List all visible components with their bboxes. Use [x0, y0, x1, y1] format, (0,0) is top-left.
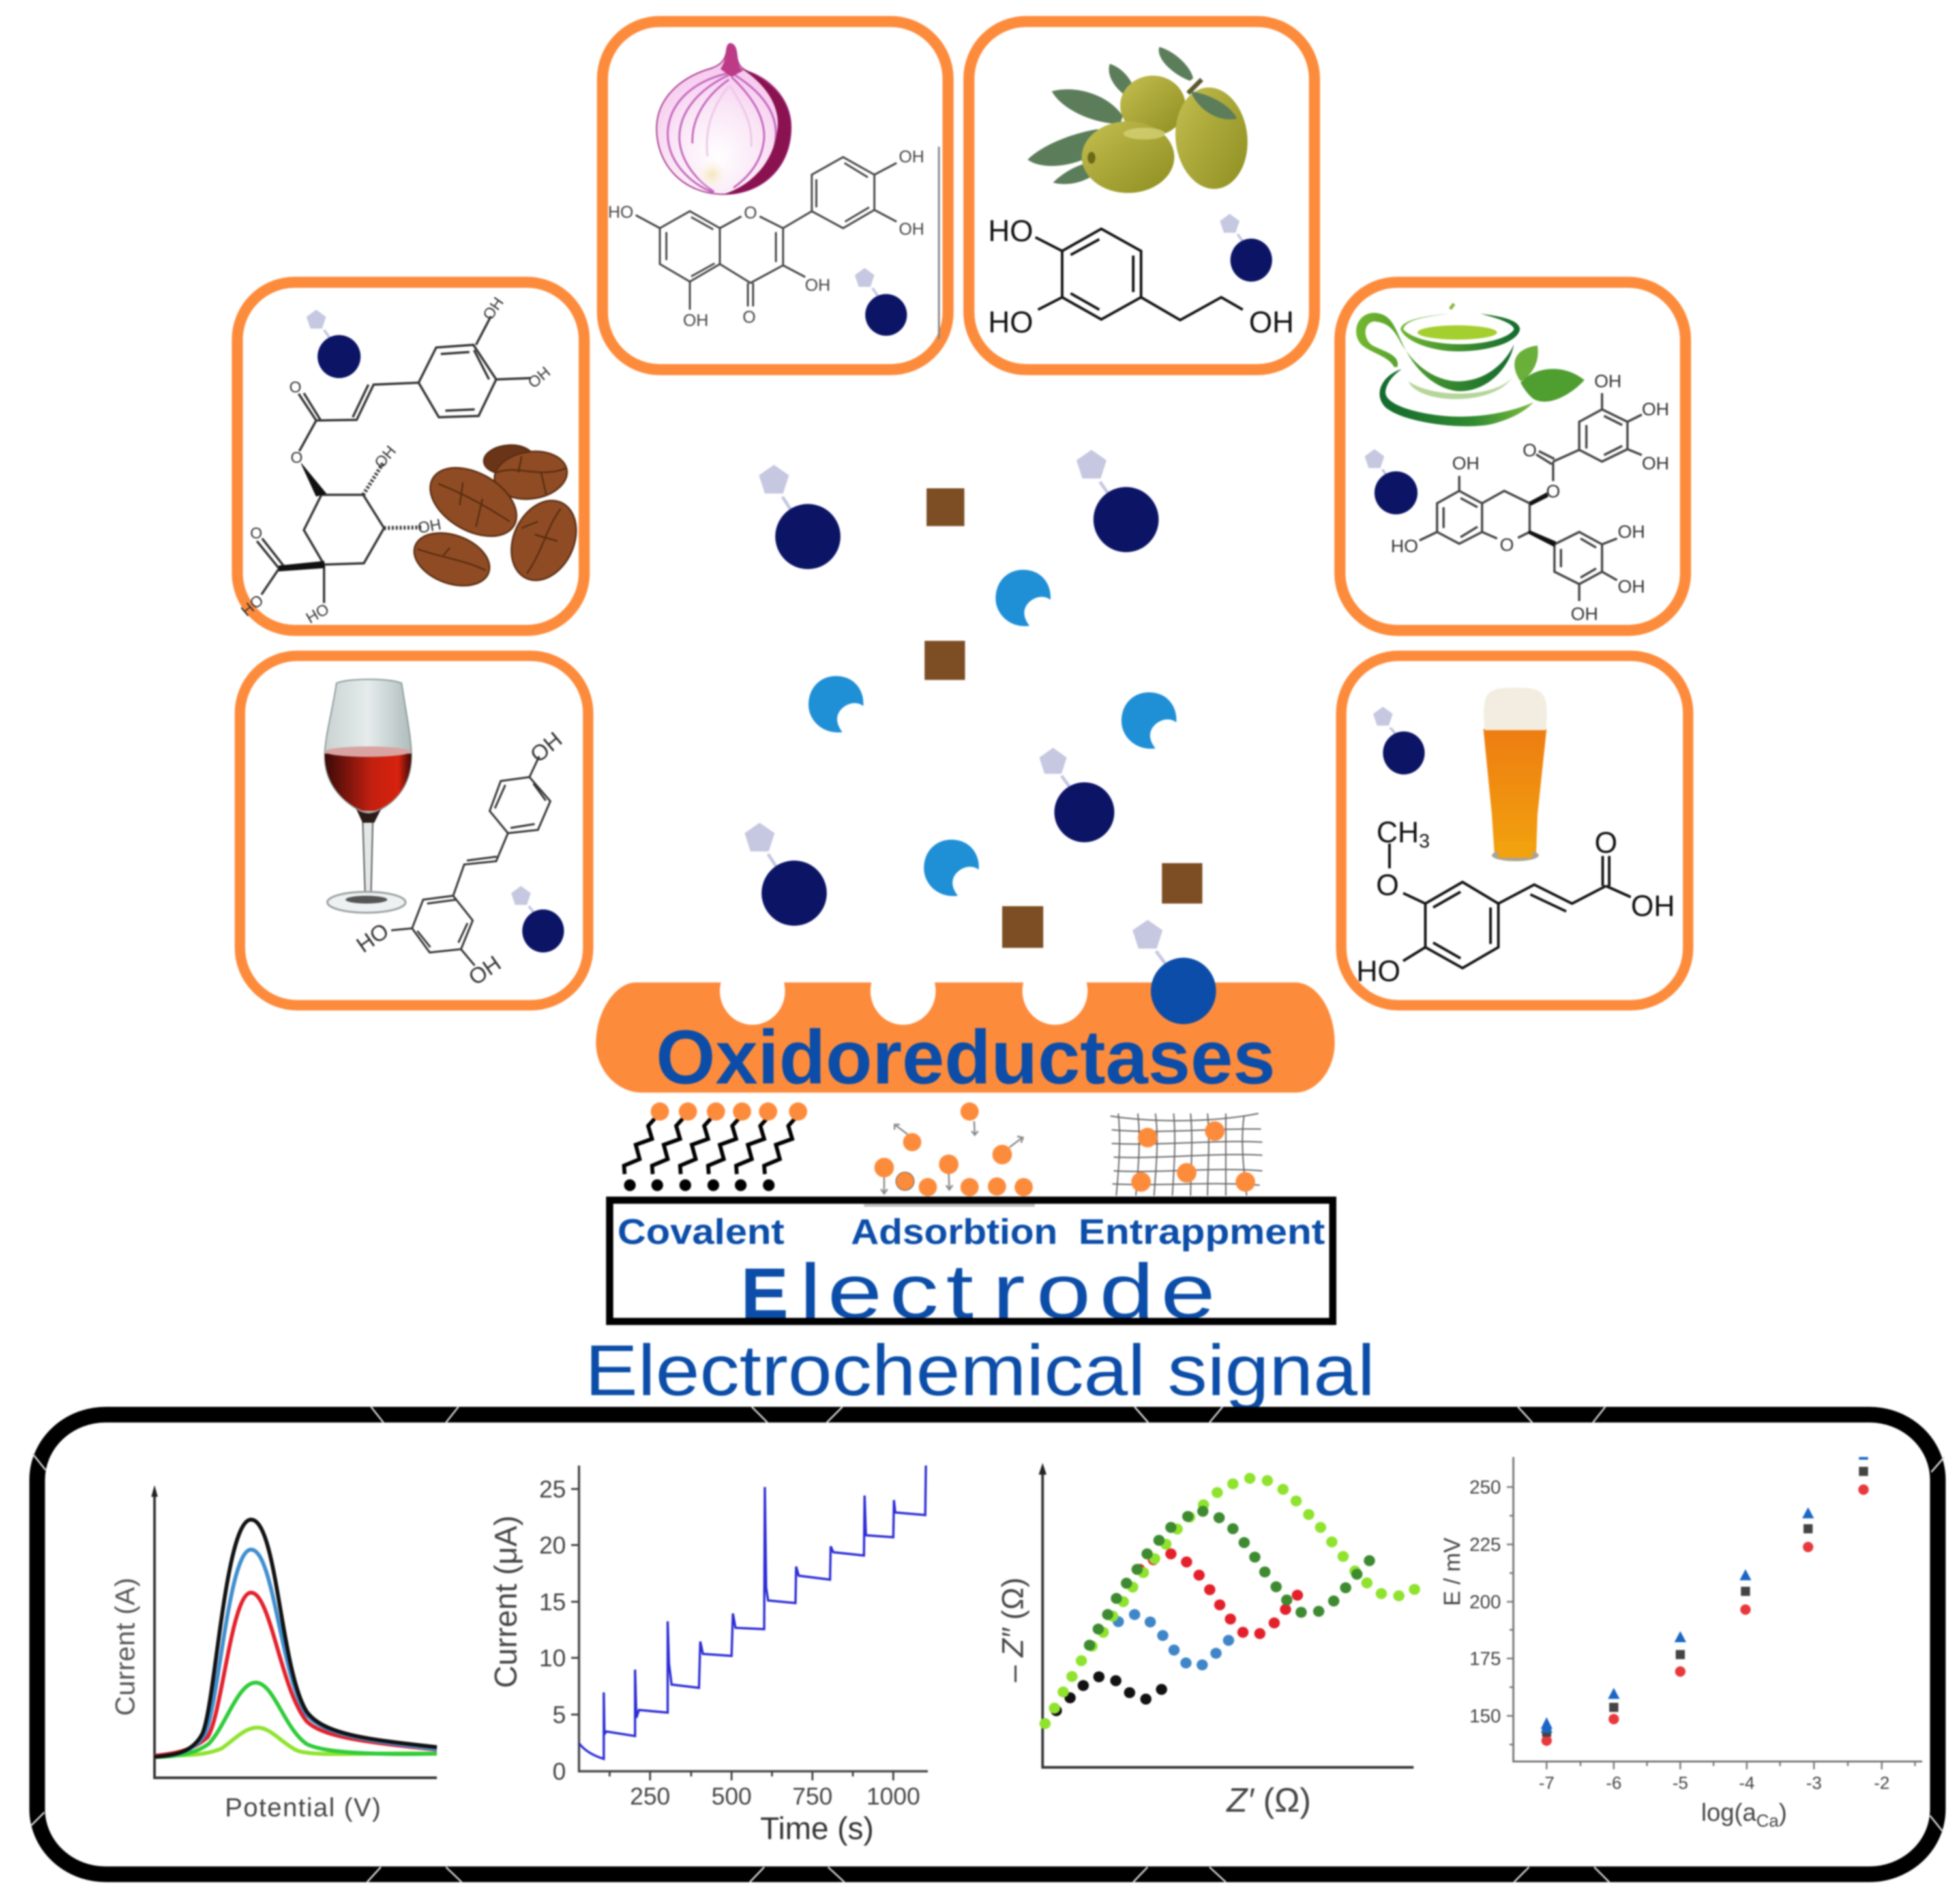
chemical structure: hydroxytyrosol — [988, 214, 1294, 339]
chemical structure: epigallocatechin gallate: OH — [1642, 453, 1669, 473]
icon: olives — [1028, 47, 1253, 193]
chart: potentiometric calibration: -3 — [1806, 1773, 1822, 1793]
electrode box with labels — [610, 1200, 1333, 1334]
chart: amperometric response: 0 — [552, 1758, 566, 1785]
chemical structure: epigallocatechin gallate: O — [1522, 440, 1537, 460]
chemical structure: ferulic acid: O — [1594, 826, 1618, 859]
chart: amperometric response: 5 — [552, 1702, 566, 1728]
icon: adsorption immobilization — [874, 1102, 1033, 1196]
chemical structure: chlorogenic acid: OH — [525, 363, 554, 392]
icon: brown square 3 — [1162, 863, 1202, 904]
chart: amperometric response: 15 — [539, 1589, 566, 1615]
chemical structure: ferulic acid: 3 — [1419, 831, 1430, 852]
x-axis label: Potential (V) — [225, 1793, 381, 1822]
chemical structure: quercetin: HO — [608, 202, 634, 222]
icon: covalent immobilization — [624, 1102, 807, 1191]
chemical structure: quercetin: O — [743, 307, 756, 327]
series: dark green points — [1084, 1506, 1375, 1651]
chemical structure: ferulic acid: O — [1376, 868, 1399, 902]
chemical structure: epigallocatechin gallate: O — [1500, 535, 1514, 555]
icon: substrate — [1373, 707, 1425, 774]
icon: brown square 4 — [1002, 906, 1043, 948]
chart: differential pulse voltammetry — [110, 1485, 437, 1822]
icon: substrate — [511, 886, 564, 952]
icon: beer glass — [1483, 688, 1547, 861]
icon: substrate — [1220, 214, 1272, 282]
panel: green tea and EGCG — [1340, 282, 1685, 630]
icon: entrapment immobilization — [1110, 1113, 1262, 1196]
chart: Nyquist plot — [996, 1463, 1420, 1820]
chart: amperometric response: 250 — [630, 1783, 670, 1810]
y-axis label: Current (μA) — [489, 1515, 524, 1688]
series: light green points — [1039, 1473, 1420, 1729]
chart: potentiometric calibration: -2 — [1874, 1773, 1890, 1793]
chart: potentiometric calibration — [1440, 1457, 1922, 1831]
chart: potentiometric calibration: -7 — [1539, 1773, 1554, 1793]
chemical structure: quercetin: OH — [805, 275, 831, 295]
label: Electrode: E — [741, 1254, 788, 1334]
chemical structure: epigallocatechin gallate: HO — [1391, 536, 1418, 556]
chemical structure: ferulic acid: CH — [1376, 816, 1419, 849]
chart: potentiometric calibration: 150 — [1470, 1706, 1501, 1727]
icon: crescent 3 — [1121, 692, 1176, 748]
floating substrate D — [745, 823, 827, 926]
label: Entrappment: Entrappment — [1078, 1211, 1325, 1252]
y-axis label: Current (A) — [110, 1578, 140, 1716]
panel: olive and hydroxytyrosol — [969, 22, 1314, 370]
chemical structure: ferulic acid: OH — [1631, 889, 1675, 922]
chemical structure: quercetin: OH — [683, 310, 708, 330]
icon: red onion — [657, 44, 791, 194]
chemical structure: ferulic acid — [1356, 816, 1675, 988]
icon: coffee beans — [407, 443, 589, 595]
series: black points — [1050, 1672, 1167, 1717]
x-axis label: log(a — [1701, 1799, 1757, 1827]
chemical structure: epigallocatechin gallate — [1391, 371, 1669, 624]
heading: Oxidoreductases: Oxidoreductases — [656, 1014, 1275, 1100]
chart: amperometric response: 10 — [539, 1645, 566, 1672]
chemical structure: chlorogenic acid: OH — [371, 443, 400, 472]
chemical structure: epigallocatechin gallate: O — [1546, 481, 1560, 501]
chemical structure: chlorogenic acid: O — [291, 449, 303, 467]
chemical structure: resveratrol: OH — [526, 728, 567, 768]
chart: potentiometric calibration: -5 — [1672, 1773, 1688, 1793]
floating substrate A — [759, 465, 840, 569]
icon: crescent 4 — [924, 840, 979, 896]
chart: amperometric response: 20 — [539, 1532, 566, 1559]
chemical structure: epigallocatechin gallate: OH — [1452, 453, 1479, 473]
chemical structure: chlorogenic acid: HO — [303, 600, 333, 627]
chemical structure: chlorogenic acid: OH — [479, 294, 507, 323]
icon: wine glass — [325, 679, 411, 913]
x-axis label: ) — [1779, 1799, 1787, 1827]
chart: potentiometric calibration: 225 — [1470, 1535, 1501, 1555]
chemical structure: hydroxytyrosol: HO — [988, 305, 1033, 339]
series: blue points — [1112, 1609, 1234, 1670]
chart: amperometric response: 750 — [792, 1783, 833, 1810]
chart: amperometric response — [489, 1466, 928, 1846]
chart: potentiometric calibration: -4 — [1739, 1773, 1755, 1793]
chemical structure: hydroxytyrosol: HO — [988, 214, 1033, 248]
enzyme: oxidoreductases bar with binding pockets — [596, 920, 1335, 1100]
panel: onion and quercetin — [602, 22, 948, 370]
icon: crescent 1 — [996, 570, 1050, 626]
panel: wine and resveratrol — [240, 656, 588, 1005]
chemical structure: quercetin — [608, 147, 939, 339]
series: blue triangles — [1541, 1457, 1868, 1733]
chemical structure: resveratrol — [352, 728, 567, 990]
docked substrate — [1133, 920, 1216, 1024]
icon: brown square 1 — [927, 488, 964, 526]
series: red points — [1134, 1548, 1303, 1639]
x-axis label: Time (s) — [760, 1812, 874, 1846]
chemical structure: quercetin: O — [744, 203, 757, 222]
icon: tea cup — [1356, 304, 1584, 426]
series: red circles — [1541, 1484, 1869, 1746]
panel: electrochemical signal frame — [31, 1407, 1944, 1882]
x-axis label: Ca — [1757, 1811, 1779, 1831]
icon: brown square 2 — [925, 641, 965, 680]
chemical structure: epigallocatechin gallate: OH — [1618, 522, 1645, 542]
chemical structure: hydroxytyrosol: OH — [1249, 305, 1294, 339]
chart: potentiometric calibration: -6 — [1606, 1773, 1622, 1793]
chemical structure: chlorogenic acid — [238, 294, 554, 627]
chemical structure: quercetin: OH — [898, 219, 925, 239]
chart: potentiometric calibration: 250 — [1470, 1477, 1501, 1498]
floating substrate B — [1077, 450, 1159, 552]
heading: Electrochemical signal: Electrochemical signal — [585, 1331, 1375, 1411]
chart: potentiometric calibration: 200 — [1470, 1592, 1501, 1613]
floating substrate C — [1039, 748, 1114, 842]
chemical structure: chlorogenic acid: HO — [238, 591, 267, 620]
icon: substrate — [1365, 449, 1418, 514]
chemical structure: chlorogenic acid: O — [290, 379, 301, 396]
chemical structure: epigallocatechin gallate: OH — [1594, 371, 1622, 391]
chemical structure: epigallocatechin gallate: OH — [1618, 576, 1645, 597]
chart: amperometric response: 1000 — [867, 1783, 920, 1810]
chemical structure: resveratrol: OH — [464, 951, 505, 990]
icon: substrate — [306, 310, 361, 378]
chemical structure: chlorogenic acid: O — [250, 525, 262, 542]
y-axis label: – Z″ (Ω) — [996, 1578, 1030, 1682]
label: Adsorbtion: Adsorbtion — [851, 1211, 1058, 1252]
icon: crescent 2 — [809, 676, 863, 732]
chemical structure: resveratrol: HO — [352, 919, 393, 958]
label: Electrode: lectrode — [799, 1248, 1215, 1334]
y-axis label: E / mV — [1440, 1537, 1465, 1606]
chemical structure: ferulic acid: HO — [1356, 954, 1401, 988]
chemical structure: epigallocatechin gallate: OH — [1642, 399, 1669, 419]
chart: potentiometric calibration: 175 — [1470, 1649, 1501, 1670]
chart: amperometric response: 25 — [539, 1476, 566, 1503]
x-axis label: Z′ (Ω) — [1225, 1782, 1311, 1820]
icon: substrate — [855, 268, 907, 336]
chart: amperometric response: 500 — [711, 1783, 752, 1810]
panel: beer and ferulic acid — [1341, 656, 1688, 1005]
chemical structure: quercetin: OH — [898, 147, 925, 166]
series: black squares — [1542, 1467, 1868, 1737]
chemical structure: chlorogenic acid: OH — [417, 516, 443, 537]
label: Covalent: Covalent — [617, 1211, 784, 1252]
chemical structure: epigallocatechin gallate: OH — [1571, 604, 1598, 624]
panel: coffee and chlorogenic acid — [237, 282, 589, 630]
